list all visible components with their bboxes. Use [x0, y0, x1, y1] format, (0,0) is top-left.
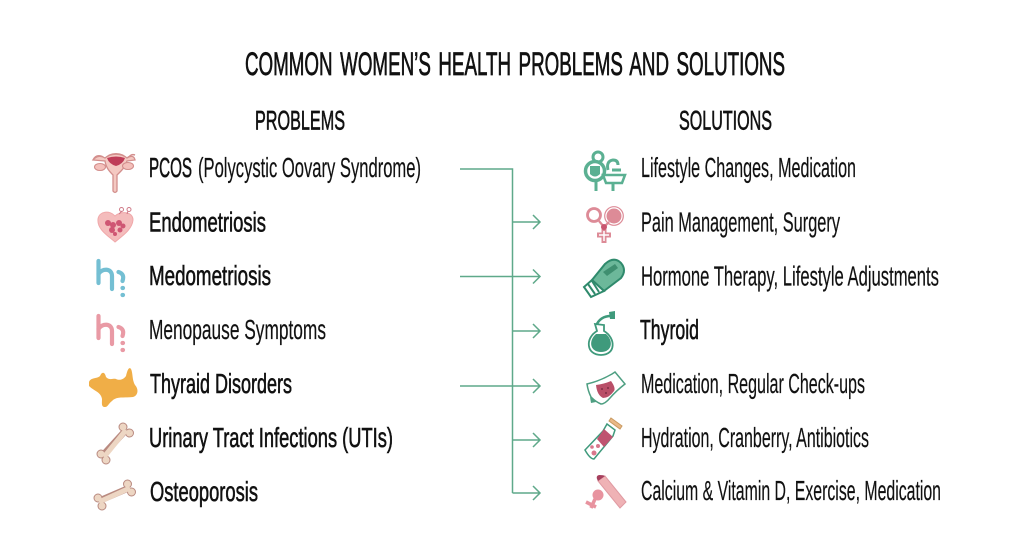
problem: thyroid disorders — [89, 368, 292, 407]
arrows: connector tree — [460, 169, 540, 500]
label: Osteoporosis — [150, 476, 258, 507]
icon: bone — [94, 480, 136, 510]
problem: UTIs — [97, 422, 393, 464]
label: Thyroid — [640, 314, 699, 345]
icon: round flask — [589, 311, 615, 355]
solution: hydration — [585, 418, 869, 459]
label detail: (Polycystic Oovary Syndrome) — [198, 152, 421, 183]
label: Endometriosis — [149, 206, 266, 238]
problem: PCOS — [93, 152, 421, 192]
icon: bottle — [585, 418, 622, 459]
solution: pain management — [588, 206, 840, 243]
label: Lifestyle Changes, Medication — [641, 152, 856, 183]
label: Hydration, Cranberry, Antibiotics — [641, 422, 869, 453]
problem: osteoporosis — [94, 476, 258, 510]
icon: green bottle — [584, 260, 624, 297]
icon: gender symbols — [588, 207, 623, 243]
label: Medometriosis — [149, 260, 271, 291]
label: PCOS — [149, 152, 192, 183]
solution: thyroid — [589, 311, 699, 355]
label: Thyraid Disorders — [150, 368, 292, 399]
icon: heart — [98, 208, 133, 242]
icon: green lifestyle — [586, 152, 625, 191]
solution: lifestyle — [586, 152, 856, 191]
label: Medication, Regular Check-ups — [641, 368, 865, 399]
heading: problems: PROBLEMS — [255, 106, 345, 136]
icon: pencil and female symbol — [586, 475, 626, 508]
heading: solutions: SOLUTIONS — [679, 106, 772, 136]
solution: calcium — [586, 475, 941, 508]
icon: iv pouch — [587, 372, 625, 404]
label: Menopause Symptoms — [149, 314, 326, 345]
problem: medometriosis — [98, 260, 271, 295]
solution: hormone therapy — [584, 260, 939, 297]
icon: blue glyph — [98, 261, 123, 295]
solution: medication — [587, 368, 865, 404]
label: Urinary Tract Infections (UTIs) — [149, 422, 393, 453]
panel: solutions list — [584, 152, 941, 508]
icon: pink glyph — [98, 316, 123, 350]
problem: endometriosis — [98, 206, 266, 242]
panel: problems list — [89, 152, 421, 510]
icon: thyroid blob — [89, 368, 137, 407]
icon: uterus — [93, 154, 135, 192]
problem: menopause — [98, 314, 326, 350]
label: Pain Management, Surgery — [641, 206, 840, 238]
icon: bone — [97, 423, 134, 464]
